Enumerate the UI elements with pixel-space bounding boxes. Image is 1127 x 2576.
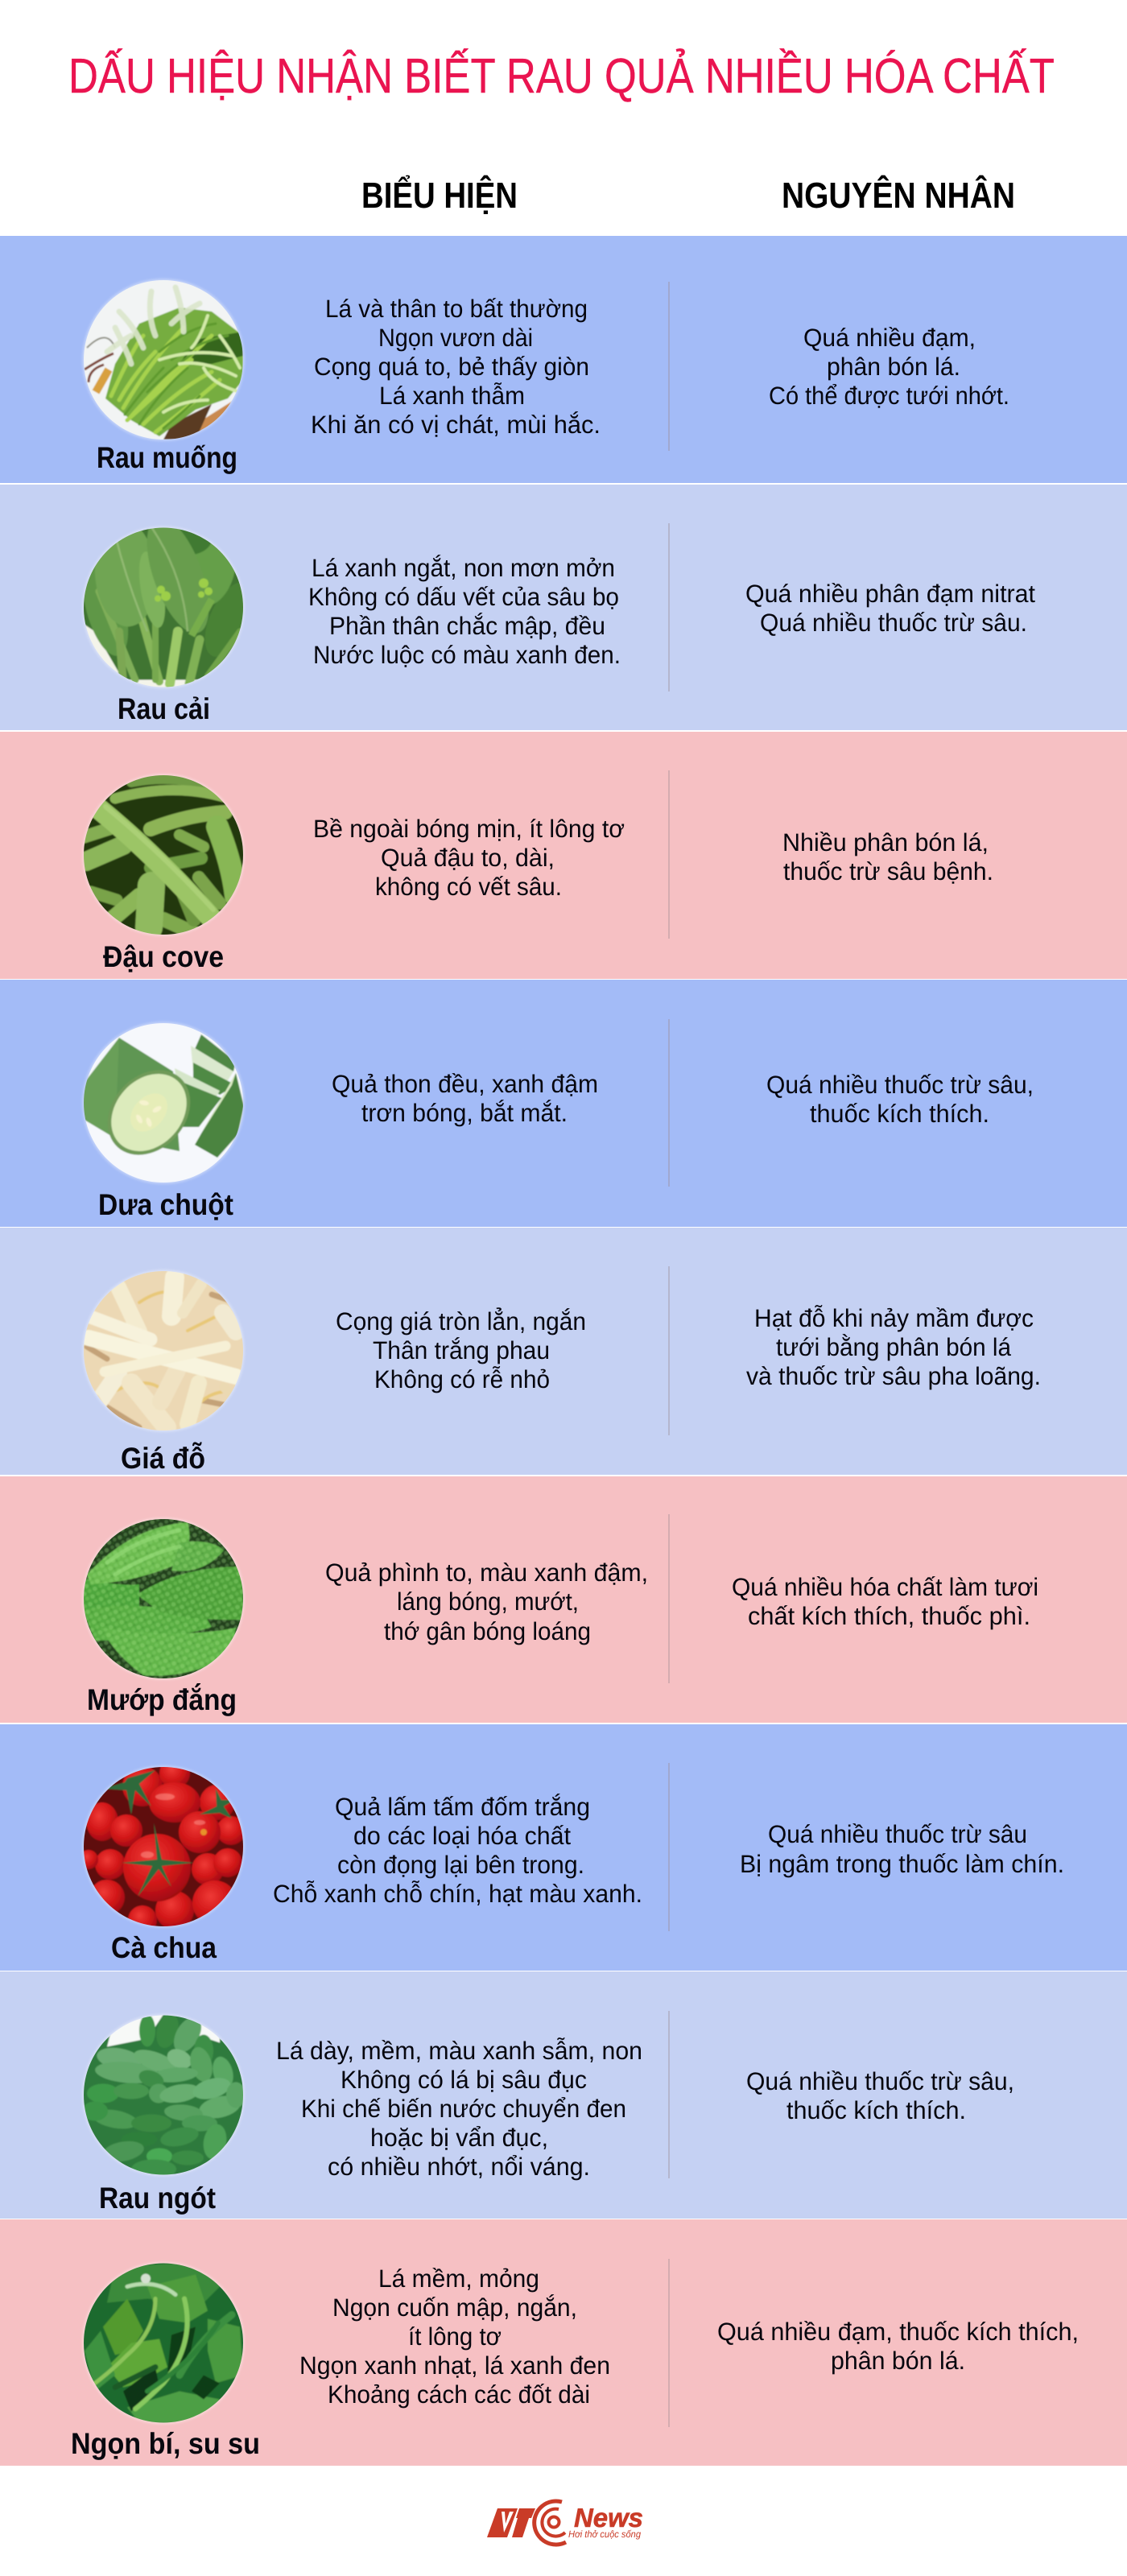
symptoms text: Quả thon đều, xanh đậm — [332, 1070, 598, 1098]
symptoms text: ít lông tơ — [408, 2322, 502, 2351]
symptoms text: Ngọn xanh nhạt, lá xanh đen — [299, 2351, 610, 2380]
symptoms text: không có vết sâu. — [375, 873, 562, 901]
symptoms text: Quả đậu to, dài, — [381, 844, 555, 872]
column header: causes: NGUYÊN NHÂN — [782, 175, 1015, 216]
causes text — [769, 324, 1009, 410]
icon: green beans photo — [83, 774, 244, 935]
label: Ngọn bí, su su — [71, 2427, 260, 2460]
logo: VTC News: News — [574, 2503, 643, 2533]
label: Đậu cove — [103, 940, 224, 973]
symptoms text: Bề ngoài bóng mịn, ít lông tơ — [313, 815, 625, 843]
symptoms text — [313, 815, 625, 901]
symptoms text: Nước luộc có màu xanh đen. — [313, 641, 621, 669]
symptoms text: Ngọn cuốn mập, ngắn, — [332, 2293, 577, 2322]
label: Dưa chuột — [98, 1188, 233, 1221]
logo: VTC News — [487, 2501, 643, 2545]
logo: VTC News: Hơi thở cuộc sống — [568, 2529, 641, 2540]
causes text: và thuốc trừ sâu pha loãng. — [746, 1362, 1041, 1390]
symptoms text: Quả lấm tấm đốm trắng — [335, 1793, 590, 1821]
causes text: chất kích thích, thuốc phì. — [748, 1602, 1030, 1630]
symptoms text — [299, 2264, 610, 2409]
symptoms text: Cọng giá tròn lẳn, ngắn — [336, 1307, 586, 1335]
causes text: Quá nhiều thuốc trừ sâu, — [746, 2067, 1014, 2095]
causes text — [732, 1573, 1038, 1630]
symptoms text: Khi chế biến nước chuyển đen — [301, 2095, 626, 2123]
label: Rau muống — [97, 441, 237, 474]
causes text: Bị ngâm trong thuốc làm chín. — [740, 1850, 1064, 1878]
label: Giá đỗ — [121, 1442, 205, 1475]
causes text — [782, 828, 993, 886]
causes text — [740, 1820, 1064, 1878]
icon: mustard greens photo — [84, 528, 243, 687]
icon: katuk leaves photo — [82, 2011, 246, 2178]
panel: cà chua — [0, 1724, 1127, 1971]
label: Rau cải — [118, 692, 210, 725]
causes text: tưới bằng phân bón lá — [776, 1333, 1012, 1361]
panel: rau muống — [0, 236, 1127, 483]
symptoms text: thớ gân bóng loáng — [384, 1617, 591, 1645]
causes text: Quá nhiều đạm, — [803, 324, 976, 352]
causes text: thuốc kích thích. — [810, 1100, 989, 1128]
causes text — [746, 1304, 1041, 1390]
symptoms text: hoặc bị vẩn đục, — [370, 2124, 548, 2152]
causes text — [717, 2318, 1079, 2375]
symptoms text — [276, 2037, 642, 2181]
symptoms text: Phần thân chắc mập, đều — [329, 612, 605, 640]
causes text: Quá nhiều thuốc trừ sâu. — [760, 609, 1027, 637]
icon: bean sprouts photo — [83, 1270, 244, 1431]
symptoms text: Lá dày, mềm, màu xanh sẫm, non — [276, 2037, 642, 2065]
symptoms text: Lá và thân to bất thường — [325, 295, 588, 323]
causes text: thuốc kích thích. — [786, 2096, 966, 2124]
symptoms text: láng bóng, mướt, — [397, 1587, 579, 1616]
symptoms text — [273, 1793, 642, 1908]
icon: squash shoots photo — [83, 2262, 244, 2423]
causes text: thuốc trừ sâu bệnh. — [783, 857, 993, 886]
causes text — [745, 580, 1035, 637]
causes text: phân bón lá. — [831, 2347, 965, 2375]
symptoms text: Khi ăn có vị chát, mùi hắc. — [311, 411, 601, 439]
symptoms text — [336, 1307, 586, 1393]
symptoms text: Không có lá bị sâu đục — [341, 2066, 587, 2094]
symptoms text: Khoảng cách các đốt dài — [328, 2380, 590, 2409]
symptoms text: Không có dấu vết của sâu bọ — [308, 583, 619, 611]
causes text: Quá nhiều đạm, thuốc kích thích, — [717, 2318, 1079, 2346]
symptoms text: Lá xanh ngắt, non mơn mởn — [312, 554, 615, 582]
causes text: Quá nhiều phân đạm nitrat — [745, 580, 1035, 608]
causes text: Quá nhiều thuốc trừ sâu — [768, 1820, 1027, 1848]
symptoms text: do các loại hóa chất — [353, 1822, 571, 1850]
symptoms text: Lá mềm, mỏng — [378, 2264, 539, 2293]
label: Rau ngót — [99, 2182, 216, 2215]
panel: ngọn bí, su su — [0, 2219, 1127, 2466]
icon: tomatoes photo — [84, 1767, 243, 1926]
label: Cà chua — [111, 1931, 217, 1964]
symptoms text — [308, 554, 621, 669]
symptoms text: Ngọn vươn dài — [378, 324, 533, 352]
label: Mướp đắng — [87, 1683, 237, 1716]
icon: water spinach photo — [83, 279, 244, 440]
symptoms text: Không có rễ nhỏ — [374, 1365, 550, 1393]
causes text: phân bón lá. — [827, 353, 960, 381]
icon: bitter melon photo — [83, 1518, 244, 1679]
column header: symptoms: BIỂU HIỆN — [361, 175, 518, 216]
causes text: Quá nhiều hóa chất làm tươi — [732, 1573, 1038, 1601]
causes text: Hạt đỗ khi nảy mầm được — [754, 1304, 1034, 1332]
symptoms text — [332, 1070, 598, 1127]
causes text — [766, 1071, 1034, 1128]
symptoms text: có nhiều nhớt, nổi váng. — [328, 2153, 590, 2181]
causes text: Nhiều phân bón lá, — [782, 828, 989, 857]
symptoms text — [325, 1558, 648, 1645]
symptoms text: trơn bóng, bắt mắt. — [361, 1099, 568, 1127]
causes text: Quá nhiều thuốc trừ sâu, — [766, 1071, 1034, 1099]
symptoms text — [311, 295, 601, 439]
causes text — [746, 2067, 1014, 2124]
symptoms text: Cọng quá to, bẻ thấy giòn — [314, 353, 589, 381]
panel: rau cải — [0, 485, 1127, 730]
panel: rau ngót — [0, 1971, 1127, 2219]
panel: đậu cove — [0, 732, 1127, 979]
causes text: Có thể được tưới nhớt. — [769, 382, 1009, 410]
symptoms text: Chỗ xanh chỗ chín, hạt màu xanh. — [273, 1880, 642, 1908]
panel: dưa chuột — [0, 980, 1127, 1227]
symptoms text: còn đọng lại bên trong. — [337, 1851, 584, 1879]
symptoms text: Quả phình to, màu xanh đậm, — [325, 1558, 648, 1587]
panel: mướp đắng — [0, 1476, 1127, 1723]
symptoms text: Thân trắng phau — [373, 1336, 550, 1364]
icon: cucumber photo — [83, 1022, 244, 1183]
panel: giá đỗ — [0, 1228, 1127, 1475]
symptoms text: Lá xanh thẫm — [379, 382, 525, 410]
